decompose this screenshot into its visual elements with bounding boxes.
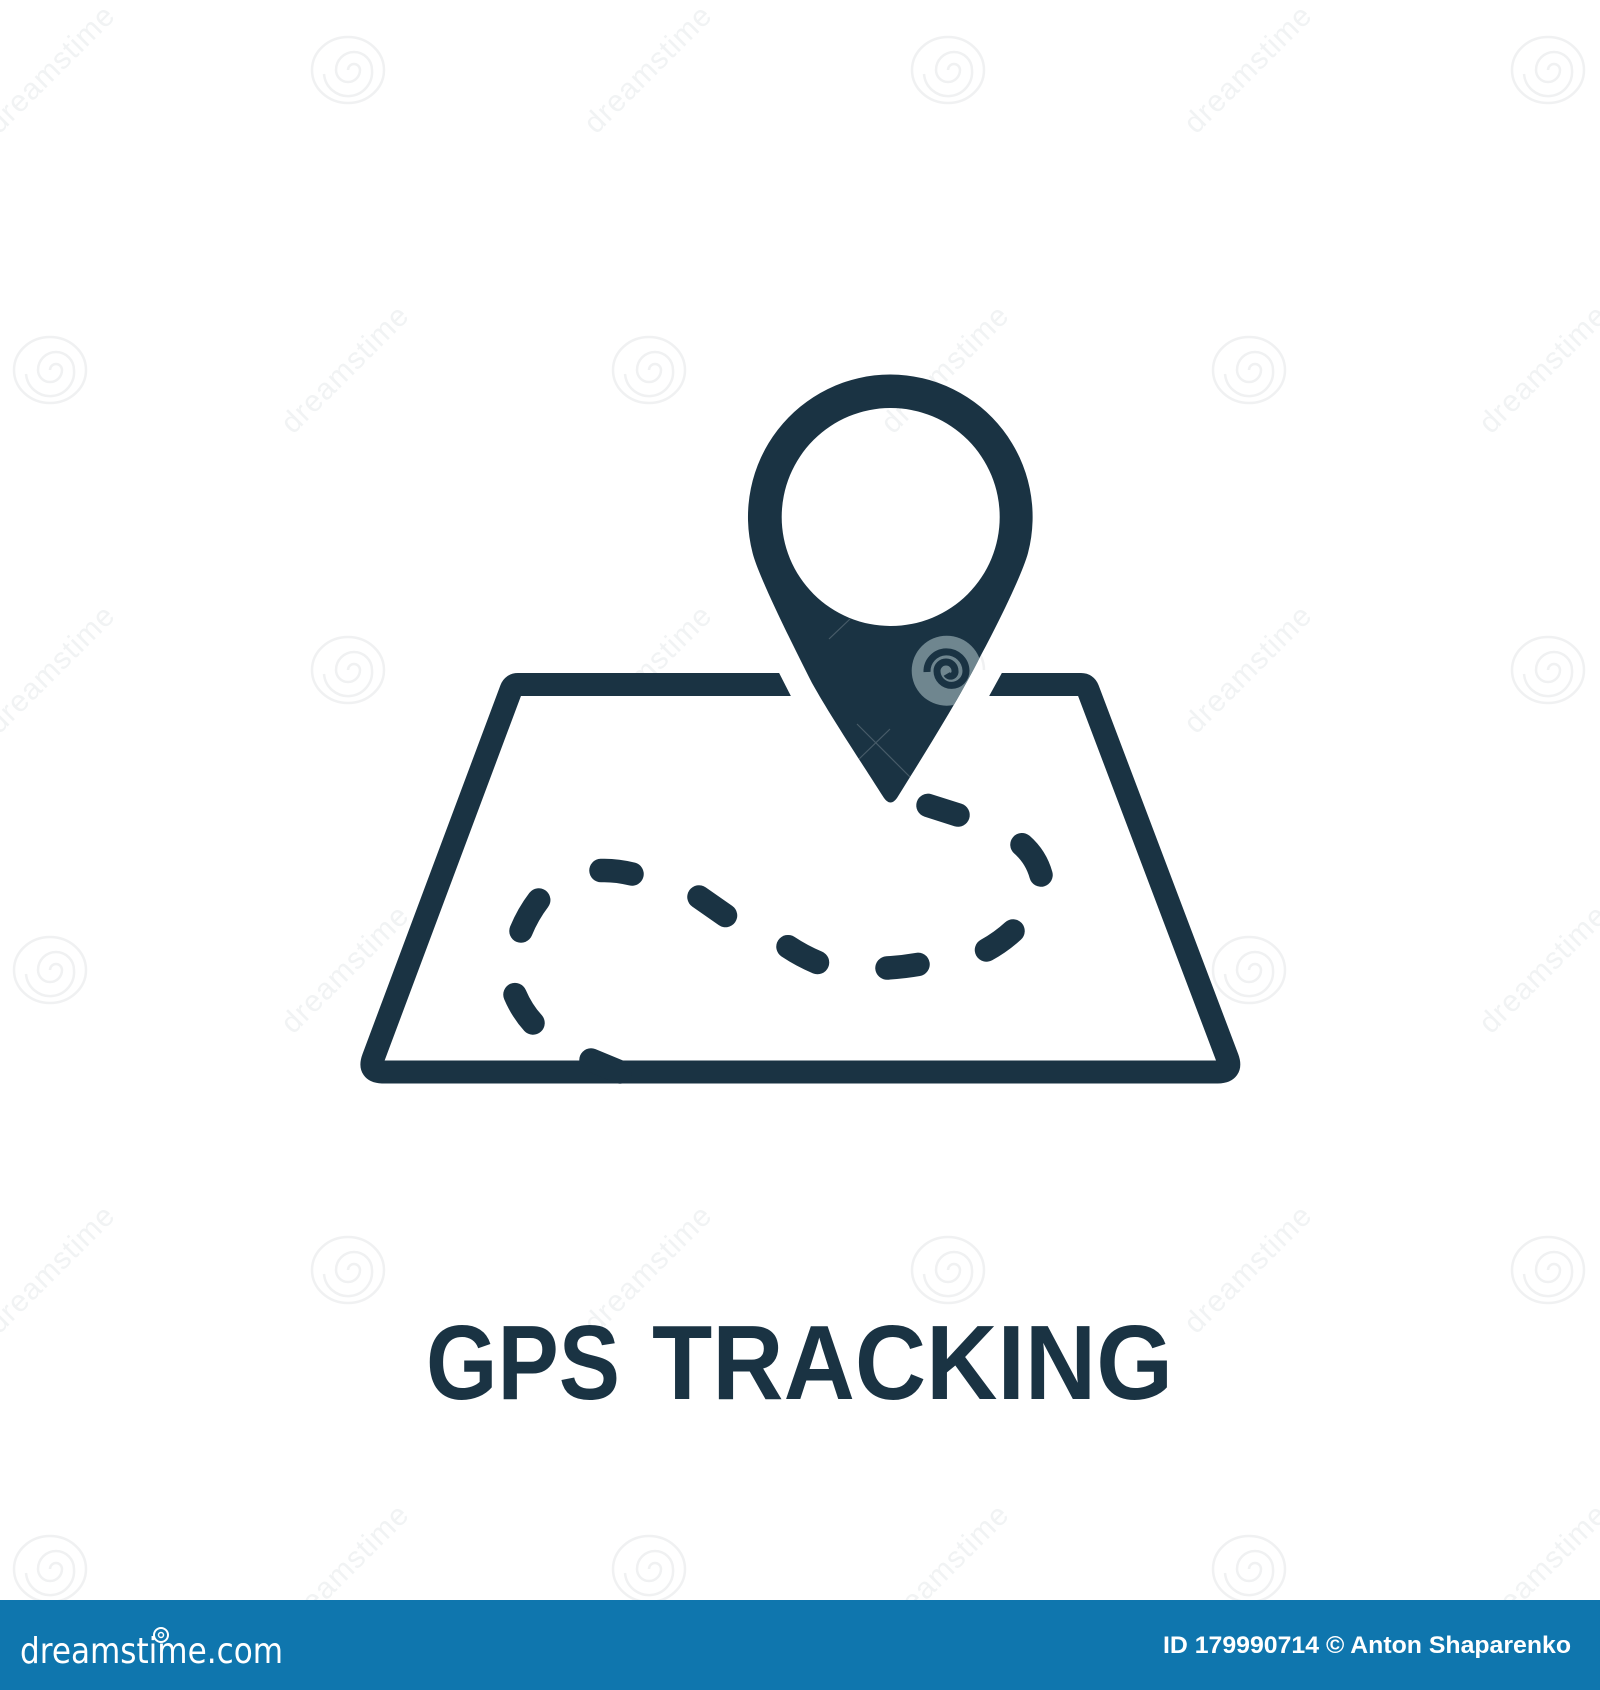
- icon: location pin: [748, 374, 1033, 802]
- watermark on pin: [829, 619, 982, 777]
- text: dreamstime: [1178, 599, 1319, 740]
- text: dreamstime: [578, 1199, 719, 1340]
- text: dreamstime: [875, 299, 1016, 440]
- icon: map with location pin and route: [372, 374, 1229, 1072]
- title: TRACKING: [652, 1304, 1173, 1422]
- text: dreamstime: [875, 899, 1016, 1040]
- footer logo: dreamstime.com: [20, 1631, 283, 1672]
- text: dreamstime: [578, 0, 719, 140]
- icon: map outline: [372, 684, 1229, 1072]
- title: GPS: [426, 1304, 620, 1422]
- icon: dashed route: [515, 805, 1041, 1072]
- text: dreamstime: [275, 1498, 416, 1639]
- footer credit: ID 179990714 © Anton Shaparenko: [1163, 1632, 1571, 1659]
- text: dreamstime: [578, 599, 719, 740]
- footer bar: [0, 1600, 1600, 1690]
- text: dreamstime: [875, 1498, 1016, 1639]
- text: dreamstime: [1178, 1199, 1319, 1340]
- text: dreamstime: [275, 899, 416, 1040]
- text: dreamstime: [1178, 0, 1319, 140]
- text: dreamstime: [275, 299, 416, 440]
- title: [426, 1304, 1173, 1422]
